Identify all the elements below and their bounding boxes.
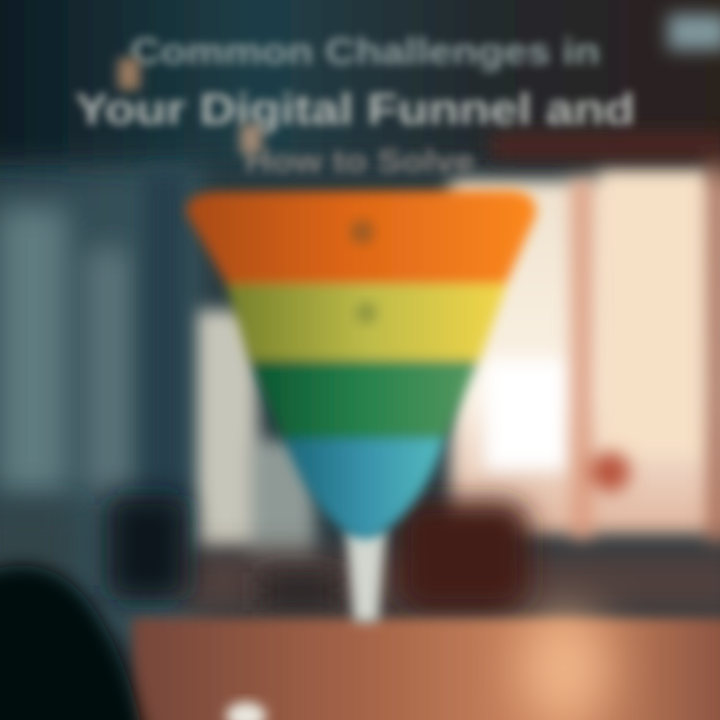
funnel tier 1: orange [186, 190, 536, 286]
window mullions and wall details [490, 14, 720, 545]
title line 1: Common Challenges in [130, 31, 600, 72]
dark chairs [0, 495, 530, 612]
title line 3: How to Solve [245, 143, 475, 179]
dark pillar [142, 170, 186, 510]
top dark ceiling band [0, 0, 720, 165]
funnel icon: yellow tier marker [355, 302, 377, 324]
funnel tier 2: yellow [226, 284, 507, 362]
pale wall beside funnel [196, 310, 315, 575]
left wall and windows [0, 100, 200, 640]
title accent marks [118, 58, 262, 154]
funnel tier 3: green [251, 360, 478, 441]
foreground silhouette [0, 566, 145, 720]
title [75, 31, 635, 179]
funnel stem [346, 530, 386, 622]
table glare [523, 613, 607, 720]
funnel chart [186, 190, 536, 539]
title line 2: Your Digital Funnel and [75, 85, 635, 134]
table top [132, 618, 720, 720]
white object on table [226, 702, 266, 720]
right bright window [450, 168, 720, 535]
funnel tier 4: blue [284, 439, 445, 539]
lower band behind table [180, 550, 720, 615]
funnel icon: orange tier marker [350, 220, 374, 244]
